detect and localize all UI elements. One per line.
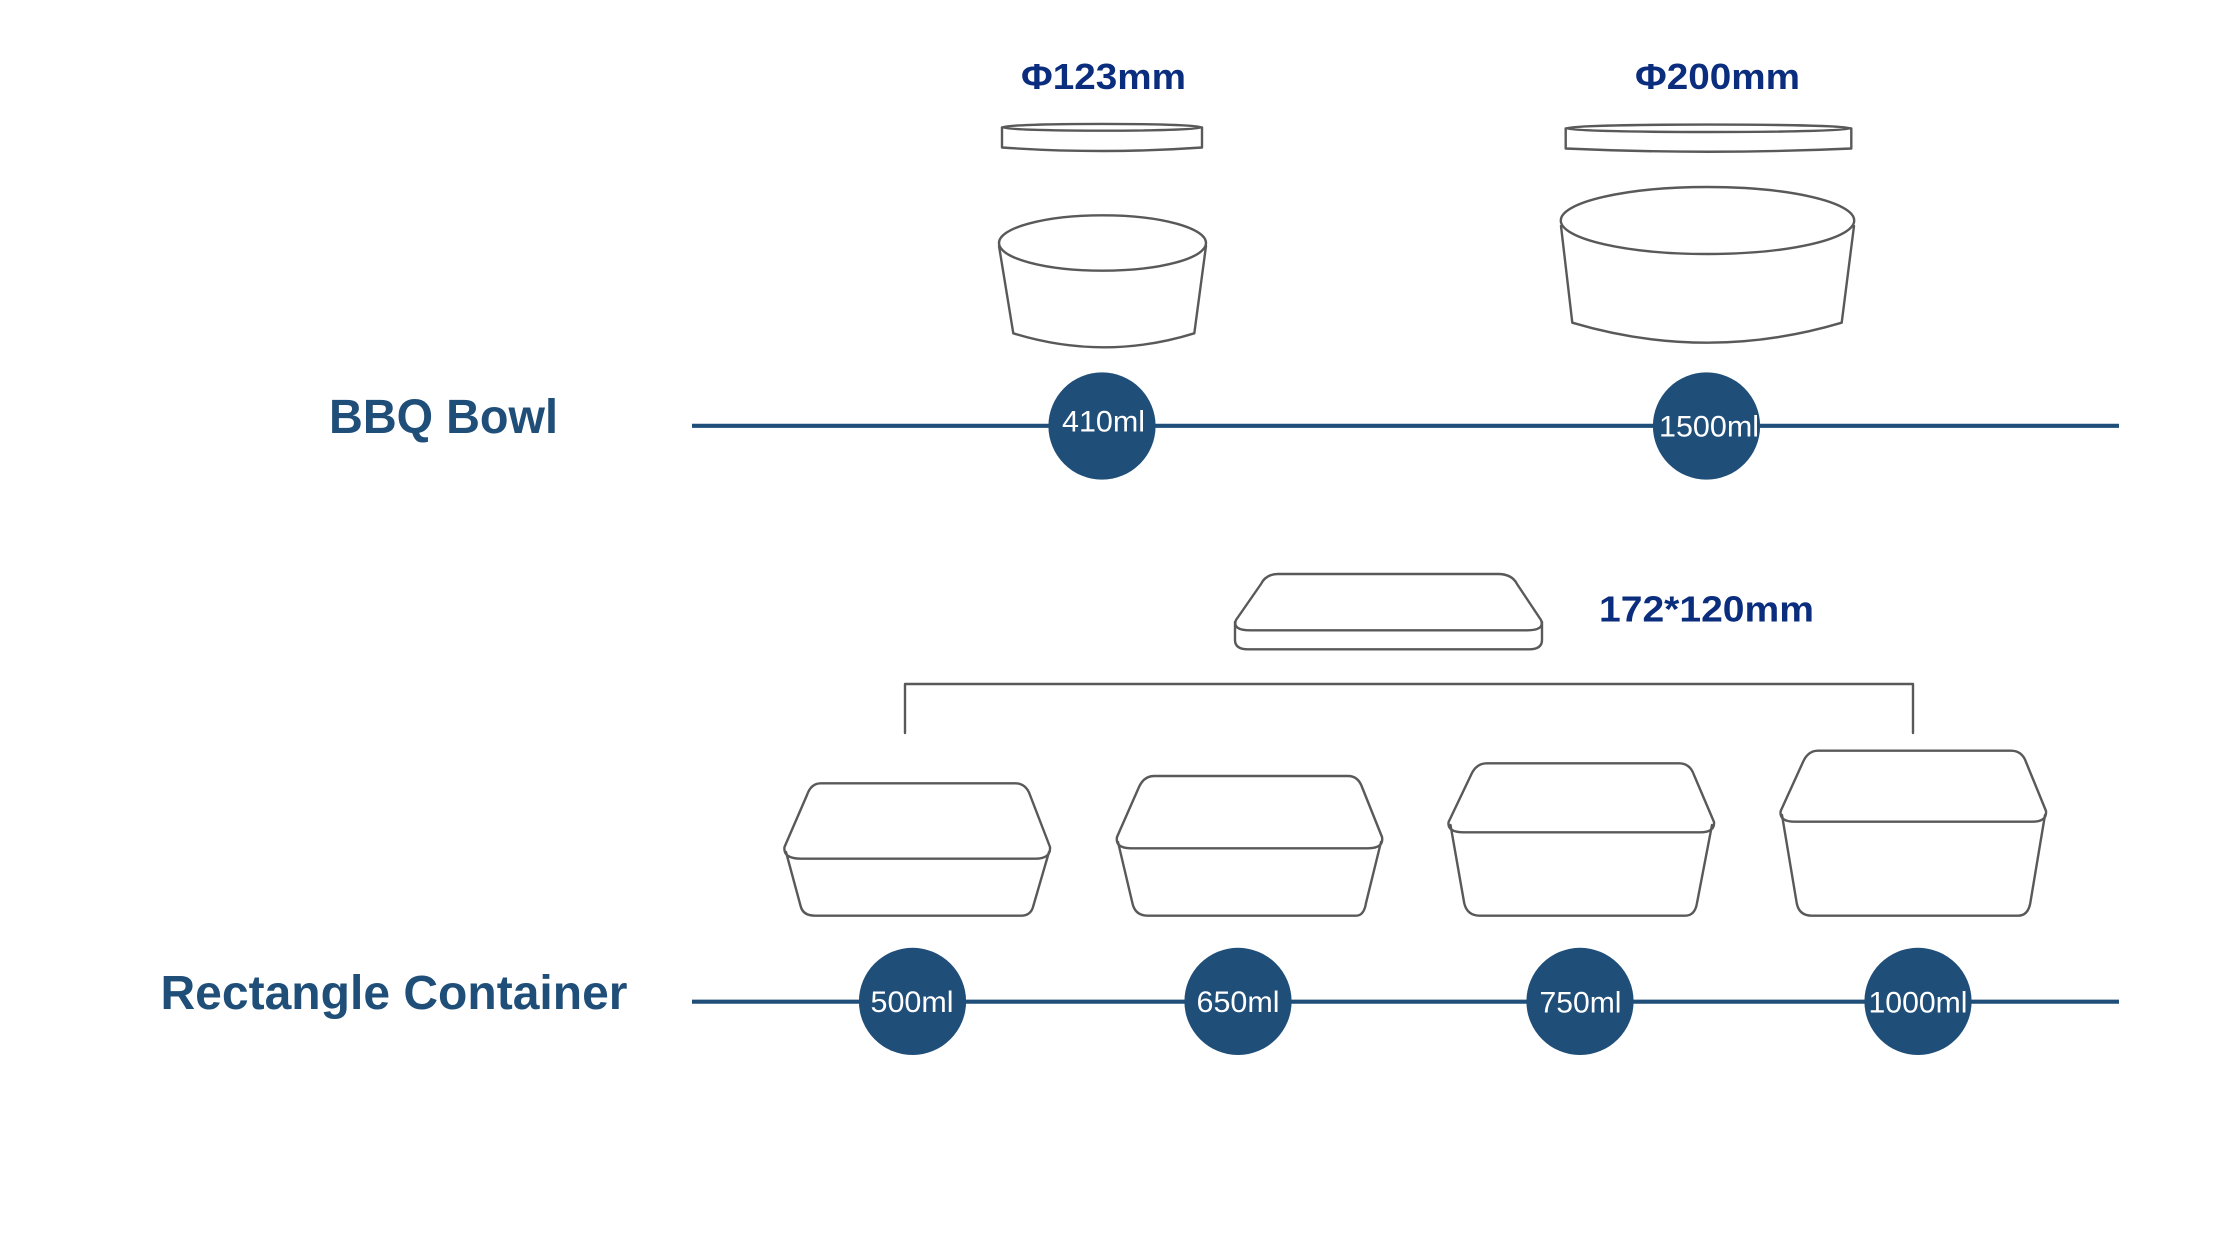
capacity badge: 410ml: 410ml — [1062, 406, 1145, 438]
capacity badge: 1000ml: 1000ml — [1868, 986, 1968, 1020]
capacity badge: 750ml — [1526, 948, 1634, 1055]
icon: 1000ml container — [1781, 751, 2046, 916]
dimension label: 172 by 120mm: 172*120mm — [1599, 589, 1814, 630]
heading: Rectangle Container: Rectangle Container — [160, 967, 628, 1020]
panel: Rectangle Container row — [160, 574, 2119, 1055]
icon: large bowl — [1561, 187, 1854, 343]
heading: BBQ Bowl: BBQ Bowl — [329, 391, 558, 444]
capacity badge: 1500ml: 1500ml — [1659, 410, 1759, 444]
panel: BBQ Bowl row — [329, 56, 2119, 480]
capacity badge: 500ml: 500ml — [870, 986, 954, 1019]
bracket linking lid to containers — [905, 684, 1913, 733]
capacity badge: 410ml — [1048, 372, 1156, 480]
capacity badge: 1000ml — [1864, 948, 1972, 1055]
capacity badge: 500ml — [859, 948, 966, 1055]
icon: large bowl lid — [1566, 125, 1851, 152]
icon: small bowl — [999, 215, 1206, 347]
icon: 500ml container — [784, 783, 1050, 916]
capacity badge: 650ml — [1184, 948, 1292, 1055]
icon: 750ml container — [1448, 763, 1714, 916]
capacity badge: 750ml: 750ml — [1540, 986, 1622, 1020]
dimension label: 200mm diameter: Φ200mm — [1635, 56, 1800, 97]
capacity badge: 1500ml — [1653, 372, 1760, 480]
dimension label: 123mm diameter: Φ123mm — [1021, 56, 1186, 97]
icon: rectangle lid — [1235, 574, 1542, 649]
capacity axis line: containers — [692, 1000, 2119, 1004]
icon: 650ml container — [1117, 776, 1382, 916]
capacity axis line: bowls — [692, 424, 2119, 428]
icon: small bowl lid — [1002, 124, 1202, 151]
capacity badge: 650ml: 650ml — [1196, 986, 1280, 1019]
